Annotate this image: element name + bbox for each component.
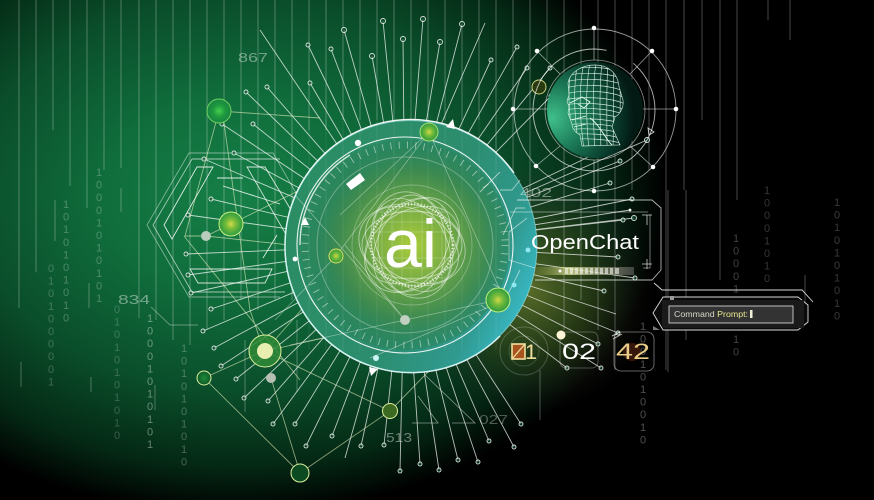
disk markers <box>293 119 530 376</box>
panel: Command Prompt <box>653 283 813 330</box>
binary columns left: 10001010101 <box>144 313 156 452</box>
counter 02 <box>556 330 598 368</box>
binary columns left: 10001010101 <box>93 167 105 306</box>
head orbit rings and dots <box>511 26 678 193</box>
binary columns left: 1010101010 <box>60 199 72 325</box>
binary columns left: 01010101010 <box>111 304 123 443</box>
panel: OpenChat frame <box>509 200 661 280</box>
counter 02: 02 <box>562 339 596 364</box>
hexagon frame left <box>147 153 300 297</box>
progress bar <box>535 267 634 275</box>
network links <box>184 111 498 473</box>
OpenChat title: OpenChat <box>531 232 640 254</box>
counters <box>500 327 654 375</box>
disk rings <box>285 120 537 373</box>
counter 42: 42 <box>616 339 650 364</box>
binary columns right <box>637 185 843 447</box>
binary columns right: 1001010010 <box>637 321 649 447</box>
wireframe sphere <box>346 179 478 311</box>
small data labels: 027 <box>479 412 508 427</box>
small data labels: 402 <box>520 185 552 200</box>
central disk <box>275 119 537 376</box>
binary columns left: 1010101010 <box>178 343 190 469</box>
prompt text: Command Prompt: <box>674 309 748 319</box>
binary columns left: 0101000001 <box>45 263 57 389</box>
label connector 834 <box>151 307 198 325</box>
counter 01 <box>500 327 548 375</box>
small data labels <box>118 50 552 445</box>
vertical data lines <box>19 0 805 420</box>
disk vertical traces <box>309 120 496 350</box>
network nodes <box>197 80 546 482</box>
binary columns right: 1010101010 <box>831 197 843 323</box>
disk interior lines <box>275 132 505 358</box>
small data labels: 513 <box>386 430 412 445</box>
small data labels: 834 <box>118 292 150 307</box>
ai logo text: ai <box>384 206 437 282</box>
binary columns right: 10001010 <box>761 185 773 286</box>
counter 42 <box>612 332 654 371</box>
head wireframe mesh <box>566 64 624 146</box>
cursor <box>750 310 752 318</box>
radial spokes <box>184 16 650 473</box>
panel: wireframe head <box>511 26 678 193</box>
counter 01: 1 <box>525 341 537 364</box>
binary columns right: 1000101010 <box>730 233 742 359</box>
binary columns left <box>45 167 190 469</box>
small data labels: 867 <box>238 50 268 65</box>
